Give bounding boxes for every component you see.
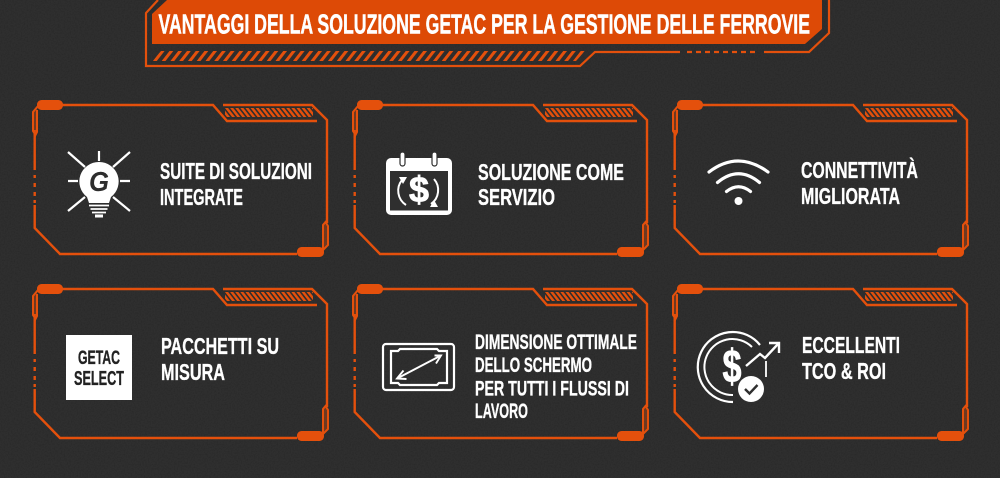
panel: dimensione ottimale dello schermo	[353, 284, 648, 441]
panel text: PACCHETTI SU	[161, 333, 279, 359]
panel: suite di soluzioni integrate	[33, 100, 328, 257]
panel text	[801, 156, 918, 209]
icon: getac select badge	[66, 335, 132, 400]
panel text: SUITE DI SOLUZIONI	[160, 158, 312, 184]
icon: getac select badge: GETAC	[78, 348, 120, 369]
panel text: MISURA	[161, 359, 225, 385]
panel text: SOLUZIONE COME	[478, 159, 624, 185]
panel text	[475, 330, 637, 423]
icon: light bulb with G	[68, 151, 130, 218]
panel text: SERVIZIO	[478, 184, 555, 210]
icon: dollar growth with check: $	[722, 340, 742, 392]
panel text	[160, 158, 312, 210]
panel text	[161, 333, 279, 385]
panel: connettivita migliorata	[673, 100, 968, 257]
panel text: ECCELLENTI	[802, 332, 900, 358]
panel text: PER TUTTI I FLUSSI DI	[475, 376, 629, 400]
icon: calendar with dollar	[386, 152, 452, 215]
panel text: DELLO SCHERMO	[475, 353, 592, 377]
icon: getac select badge: SELECT	[74, 368, 124, 390]
icon: wifi	[709, 161, 768, 205]
icon: light bulb with G: G	[89, 166, 109, 197]
panel: pacchetti su misura	[33, 284, 328, 441]
panel text: INTEGRATE	[160, 184, 243, 210]
panel text: DIMENSIONE OTTIMALE	[475, 330, 637, 354]
panel text: MIGLIORATA	[801, 183, 900, 209]
title banner	[146, 0, 829, 66]
panel text: TCO & ROI	[802, 358, 886, 384]
panel text: CONNETTIVITÀ	[801, 156, 918, 183]
panel text	[802, 332, 900, 384]
panel text	[478, 159, 624, 210]
icon: calendar with dollar: $	[409, 169, 429, 210]
icon: tablet with diagonal arrow	[383, 344, 454, 390]
panel: eccellenti tco e roi	[673, 284, 968, 441]
icon: dollar growth with check	[698, 332, 779, 404]
panel: soluzione come servizio	[353, 100, 648, 257]
panel text: LAVORO	[475, 399, 528, 423]
